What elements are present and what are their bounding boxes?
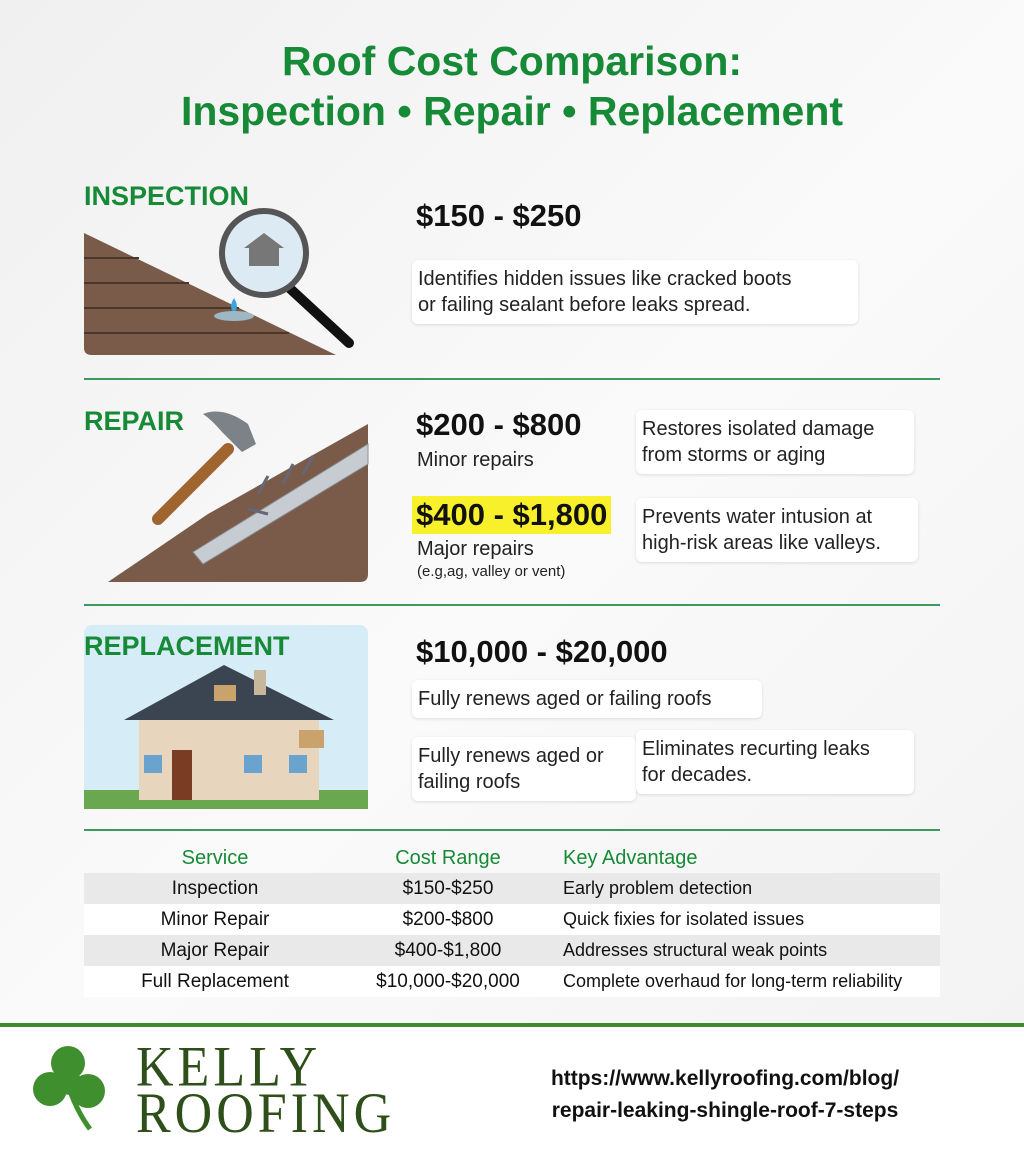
inspection description — [412, 260, 858, 324]
repair image — [108, 412, 368, 582]
icon: clover — [33, 1046, 105, 1130]
callout 3 — [636, 730, 914, 794]
comparison table — [84, 847, 940, 997]
replacement label: REPLACEMENT — [84, 631, 290, 661]
comparison table: Full Replacement — [141, 971, 289, 992]
logo text — [136, 1036, 395, 1145]
minor repair price: $200 - $800 — [416, 407, 581, 442]
major repair callout: Prevents water intusion at high-risk areas like valleys. — [642, 506, 881, 554]
title: Roof Cost Comparison: — [282, 38, 742, 84]
panel: replacement — [84, 625, 915, 809]
repair label: REPAIR — [84, 406, 184, 436]
table header: Cost Range — [395, 847, 501, 869]
comparison table: $10,000-$20,000 — [376, 971, 520, 992]
logo text: ROOFING — [136, 1082, 395, 1145]
callout 1: Fully renews aged or failing roofs — [418, 688, 711, 710]
logo text: KELLY — [136, 1036, 321, 1099]
major repair callout — [636, 498, 918, 562]
inspection description: Identifies hidden issues like cracked boots — [418, 268, 792, 290]
minor repair callout: Restores isolated damage from storms or aging — [642, 418, 874, 466]
comparison table: $200-$800 — [403, 909, 493, 930]
panel: repair: (e.g,ag, valley or vent) — [417, 563, 565, 580]
comparison table: Inspection — [172, 878, 258, 899]
url — [551, 1067, 899, 1122]
inspection description: or failing sealant before leaks spread. — [418, 294, 750, 316]
table header: Service — [182, 847, 248, 869]
callout 2: Fully renews aged or failing roofs — [418, 745, 604, 793]
comparison table: Quick fixies for isolated issues — [563, 909, 804, 929]
comparison table: $150-$250 — [403, 878, 493, 899]
callout 2 — [412, 737, 636, 801]
inspection price: $150 - $250 — [416, 198, 581, 233]
comparison table: $400-$1,800 — [395, 940, 501, 961]
title: Inspection • Repair • Replacement — [181, 88, 843, 134]
panel: repair: Major repairs — [417, 538, 534, 560]
panel: repair — [84, 406, 919, 582]
footer — [0, 1023, 1024, 1154]
inspection image — [84, 208, 354, 355]
minor repair callout — [636, 410, 914, 474]
callout 3: Eliminates recurting leaks for decades. — [642, 738, 870, 786]
panel: inspection — [84, 181, 859, 355]
major repair price: $400 - $1,800 — [416, 497, 607, 532]
url: repair-leaking-shingle-roof-7-steps — [552, 1099, 898, 1122]
callout 1 — [412, 680, 762, 718]
table header — [182, 847, 698, 869]
comparison table: Early problem detection — [563, 878, 752, 898]
url: https://www.kellyroofing.com/blog/ — [551, 1067, 899, 1090]
replacement image — [84, 625, 368, 809]
replacement price: $10,000 - $20,000 — [416, 634, 668, 669]
comparison table: Complete overhaud for long-term reliability — [563, 971, 902, 991]
inspection label: INSPECTION — [84, 181, 249, 211]
comparison table: Major Repair — [161, 940, 269, 961]
comparison table: Minor Repair — [161, 909, 269, 930]
table header: Key Advantage — [563, 847, 698, 869]
title — [181, 38, 843, 134]
comparison table: Addresses structural weak points — [563, 940, 827, 960]
panel: repair: Minor repairs — [417, 449, 534, 471]
